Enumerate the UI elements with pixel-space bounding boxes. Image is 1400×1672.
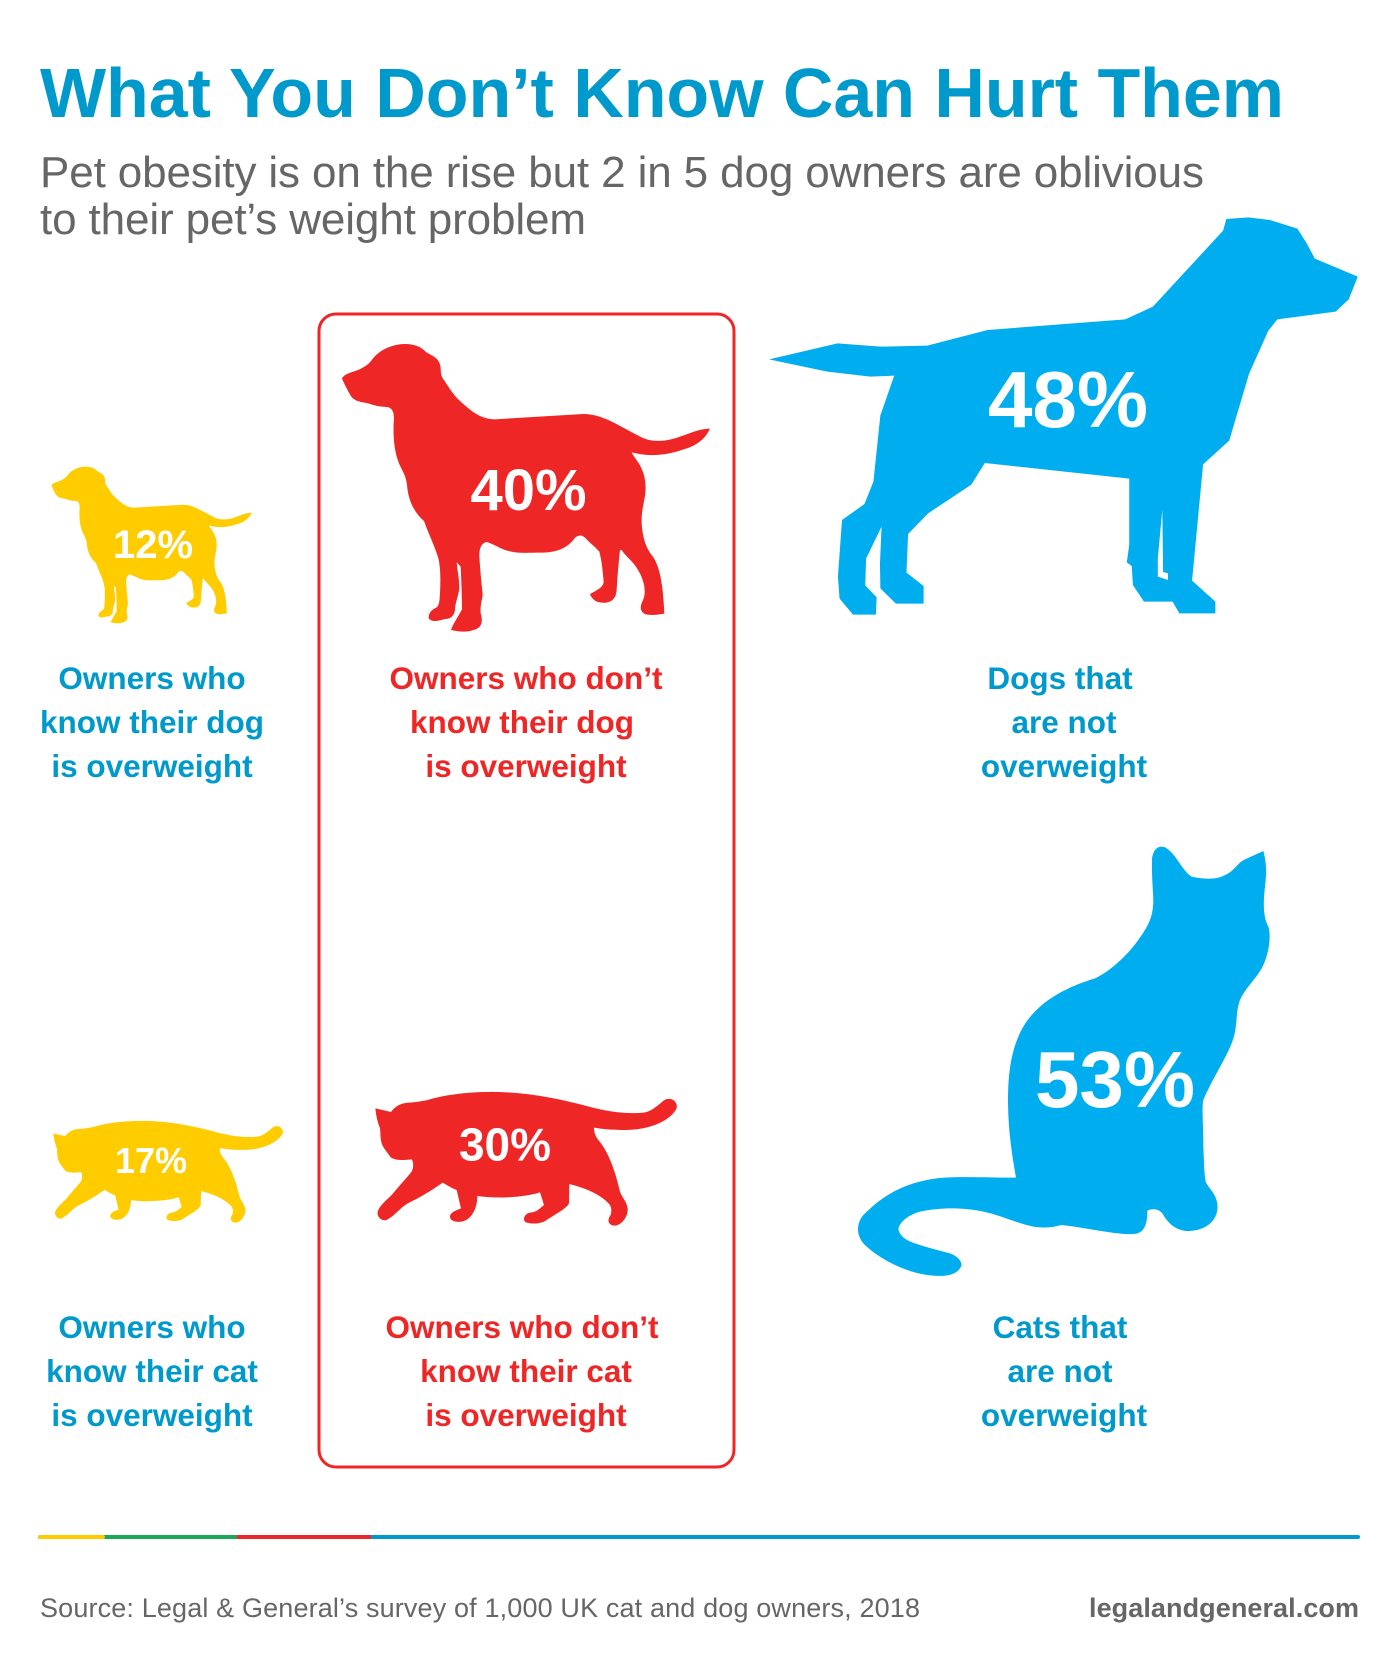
label: owners who know their cat: is overweight — [51, 1397, 253, 1433]
label: dogs that are not overweight: are not — [1011, 704, 1117, 740]
subtitle: to their pet’s weight problem — [40, 195, 586, 244]
source note: Source: Legal & General’s survey of 1,000 UK cat and dog owners, 2018 — [40, 1593, 920, 1623]
icon: yellow cat 17%: 17% — [115, 1140, 187, 1181]
label: owners who don't know their dog: is overweight — [425, 748, 627, 784]
label: owners who don't know their dog — [390, 660, 663, 784]
colour rule — [38, 1535, 1360, 1539]
label: owners who don't know their dog: Owners who don’t — [390, 660, 663, 696]
label: cats that are not overweight: are not — [1007, 1353, 1113, 1389]
label: owners who don't know their cat: Owners who don’t — [386, 1309, 659, 1345]
label: cats that are not overweight — [981, 1309, 1148, 1433]
label: owners who don't know their cat: know their cat — [420, 1353, 632, 1389]
label: cats that are not overweight: overweight — [981, 1397, 1148, 1433]
box outline — [319, 314, 734, 1467]
panel: owners who don't know (red outlined box) — [319, 314, 734, 1467]
label: owners who know their dog: know their dog — [40, 704, 264, 740]
subtitle — [40, 148, 1204, 244]
label: owners who know their dog — [40, 660, 264, 784]
label: owners who know their dog: is overweight — [51, 748, 253, 784]
icon: red cat 30%: 30% — [459, 1118, 551, 1170]
website: legalandgeneral.com — [1089, 1593, 1359, 1623]
label: owners who don't know their cat — [386, 1309, 659, 1433]
label: owners who don't know their dog: know their dog — [410, 704, 634, 740]
panel: owners who know, dog — [40, 467, 264, 784]
icon: yellow cat 17% — [53, 1121, 283, 1223]
icon: red cat 30% — [375, 1092, 677, 1226]
label: dogs that are not overweight — [981, 660, 1148, 784]
label: owners who know their cat: Owners who — [58, 1309, 246, 1345]
panel: cats not overweight — [858, 847, 1270, 1433]
label: dogs that are not overweight: Dogs that — [987, 660, 1133, 696]
icon: red dog 40% — [342, 344, 710, 632]
icon: yellow dog 12%: 12% — [113, 523, 193, 567]
label: owners who know their cat: know their cat — [46, 1353, 258, 1389]
icon: blue dog 48% — [769, 217, 1358, 615]
icon: blue dog 48%: 48% — [988, 355, 1148, 444]
title: What You Don’t Know Can Hurt Them — [40, 54, 1284, 132]
label: dogs that are not overweight: overweight — [981, 748, 1148, 784]
subtitle: Pet obesity is on the rise but 2 in 5 dog owners are oblivious — [40, 148, 1204, 197]
panel: dogs not overweight — [769, 217, 1358, 784]
icon: red dog 40%: 40% — [470, 458, 587, 523]
label: owners who don't know their cat: is overweight — [425, 1397, 627, 1433]
label: cats that are not overweight: Cats that — [993, 1309, 1128, 1345]
icon: blue cat 53% — [858, 847, 1270, 1276]
panel: owners who know, cat — [46, 1121, 283, 1433]
icon: blue cat 53%: 53% — [1035, 1035, 1195, 1124]
icon: yellow dog 12% — [51, 467, 252, 623]
label: owners who know their dog: Owners who — [58, 660, 246, 696]
label: owners who know their cat — [46, 1309, 258, 1433]
